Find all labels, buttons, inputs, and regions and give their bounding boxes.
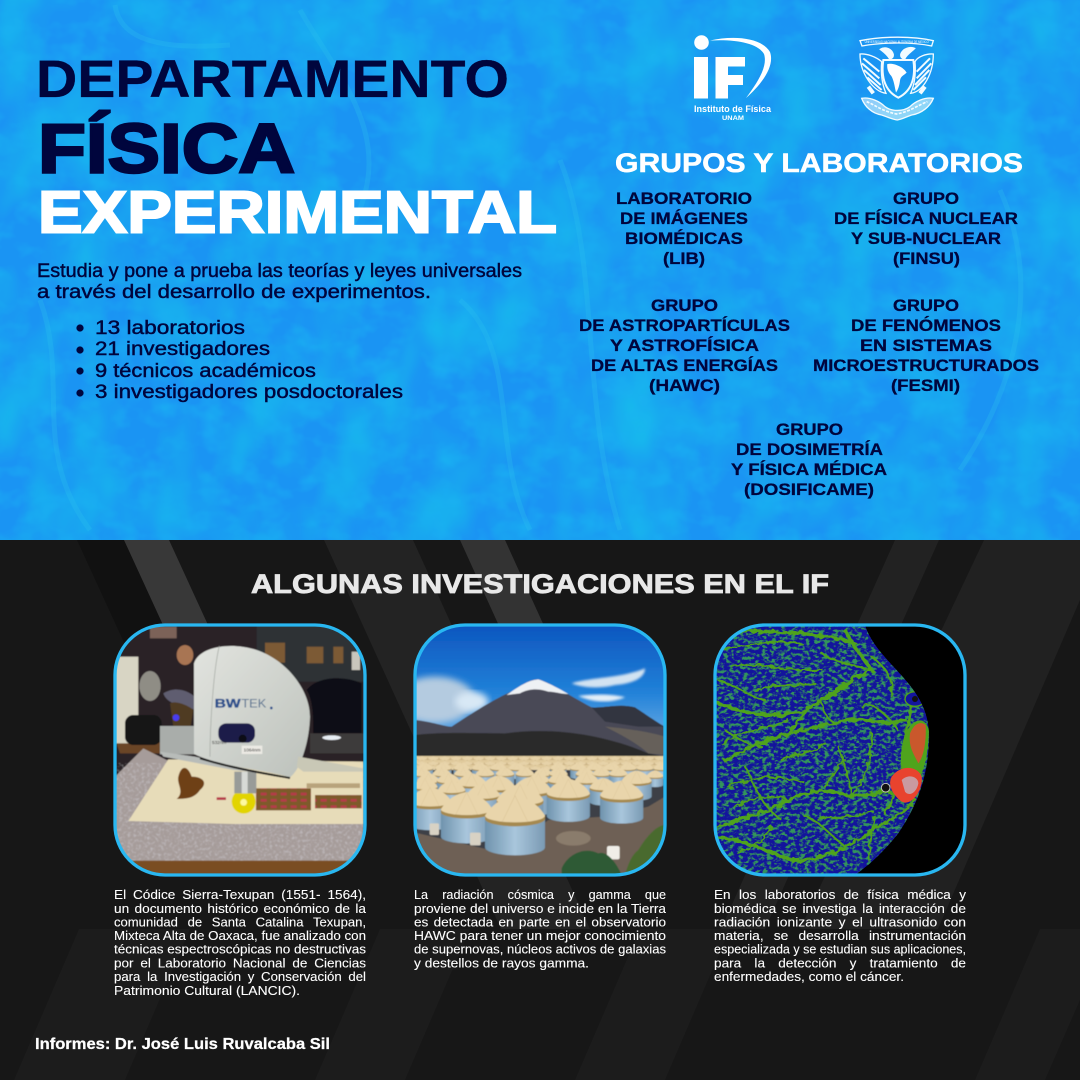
photo: spectrometer over codex: 1064nm: [244, 748, 261, 753]
group: Dosimetría y Física Médica: DE DOSIMETRÍA: [736, 440, 883, 459]
heading line: Física: FÍSICA: [38, 110, 295, 188]
list: department figures: 13 laboratorios: [95, 317, 245, 339]
icon: UNAM coat of arms: [860, 37, 933, 120]
group: Física Nuclear y Sub-Nuclear: Y SUB-NUCLEAR: [851, 229, 1001, 248]
text block: radiación cósmica: y destellos de rayos gamma.: [414, 956, 589, 970]
photo: HAWC observatory tanks and volcano: [395, 625, 670, 875]
text block: física médica y biomédica: En los laboratorios de física médica y: [714, 887, 967, 902]
text block: radiación cósmica: es detectada en parte en el observatorio: [414, 914, 666, 930]
panel: blue header background: [0, 0, 1080, 540]
group: Fenómenos en Sistemas Microestructurados: GRUPO: [893, 296, 959, 315]
text block: radiación cósmica: [414, 887, 667, 970]
heading: Algunas investigaciones en el IF: ALGUNAS INVESTIGACIONES EN EL IF: [251, 569, 829, 599]
photo: spectrometer over codex: 532nm: [212, 740, 226, 745]
text block: física médica y biomédica: especializada y se estudian sus aplicaciones,: [714, 942, 966, 956]
photo: spectrometer over codex: BW: [215, 696, 242, 710]
group: Física Nuclear y Sub-Nuclear: [834, 189, 1018, 268]
group: Laboratorio de Imágenes Biomédicas: LABORATORIO: [616, 189, 752, 208]
heading: Grupos y Laboratorios: GRUPOS Y LABORATORIOS: [615, 148, 1023, 178]
group: Astropartículas y Astrofísica: GRUPO: [651, 296, 718, 315]
group: Física Nuclear y Sub-Nuclear: DE FÍSICA NUCLEAR: [834, 209, 1018, 228]
text block: Códice Sierra-Texupan: El Códice Sierra-Texupan (1551- 1564),: [114, 887, 366, 902]
group: Dosimetría y Física Médica: (DOSIFICAME): [744, 480, 874, 499]
list: department figures: [77, 317, 403, 403]
footer: contact: Informes: Dr. José Luis Ruvalcaba Sil: [35, 1036, 330, 1053]
group: Laboratorio de Imágenes Biomédicas: BIOMÉDICAS: [625, 229, 743, 248]
group: Laboratorio de Imágenes Biomédicas: (LIB): [663, 249, 705, 268]
icon: Instituto de Física logo: Instituto de Física: [694, 104, 772, 114]
text block: Códice Sierra-Texupan: Mixteca Alta de Oaxaca, fue analizado con: [114, 928, 366, 943]
text block: Códice Sierra-Texupan: comunidad de Santa Catalina Texupan,: [114, 914, 366, 930]
group: Astropartículas y Astrofísica: DE ASTROPARTÍCULAS: [579, 316, 790, 335]
text block: física médica y biomédica: radiación ionizante y el ultrasonido con: [714, 914, 966, 930]
text block: Códice Sierra-Texupan: un documento histórico económico de la: [114, 901, 367, 916]
group: Laboratorio de Imágenes Biomédicas: [616, 189, 752, 268]
group: Dosimetría y Física Médica: Y FÍSICA MÉDICA: [731, 460, 887, 479]
panel: dark research section background: [0, 540, 1080, 1080]
photo: false-colour mammography: [715, 625, 965, 875]
group: Fenómenos en Sistemas Microestructurados: MICROESTRUCTURADOS: [813, 356, 1039, 375]
group: Laboratorio de Imágenes Biomédicas: DE IMÁGENES: [620, 209, 748, 228]
list: department figures: 9 técnicos académicos: [95, 360, 316, 382]
text block: Códice Sierra-Texupan: por el Laboratorio Nacional de Ciencias: [114, 956, 367, 970]
text block: department description: Estudia y pone a prueba las teorías y leyes universales: [37, 260, 522, 282]
list: department figures: 3 investigadores posdoctorales: [95, 381, 403, 403]
group: Fenómenos en Sistemas Microestructurados: EN SISTEMAS: [860, 336, 992, 355]
group: Astropartículas y Astrofísica: (HAWC): [649, 376, 720, 395]
heading line: Experimental: EXPERIMENTAL: [38, 180, 557, 246]
text block: física médica y biomédica: materia, se desarrolla instrumentación: [714, 928, 966, 943]
group: Física Nuclear y Sub-Nuclear: GRUPO: [893, 189, 959, 208]
icon: Instituto de Física logo: UNAM: [722, 115, 744, 122]
group: Astropartículas y Astrofísica: DE ALTAS ENERGÍAS: [591, 356, 778, 375]
title: Departamento Física Experimental: [36, 50, 557, 246]
icon: Instituto de Física logo: [694, 35, 772, 122]
text block: física médica y biomédica: para la detección y tratamiento de: [714, 956, 966, 970]
group: Astropartículas y Astrofísica: Y ASTROFÍSICA: [610, 336, 759, 355]
icon: UNAM coat of arms: UNIVERSIDAD NACIONAL AUTONOMA DE MEXICO: [865, 40, 929, 44]
text block: Códice Sierra-Texupan: para la Investigación y Conservación del: [114, 969, 366, 984]
text block: radiación cósmica: HAWC para tener un mejor conocimiento: [414, 928, 666, 943]
photo: spectrometer over codex: [115, 625, 365, 875]
text block: radiación cósmica: proviene del universo e incide en la Tierra: [414, 901, 667, 916]
group: Dosimetría y Física Médica: GRUPO: [776, 420, 843, 439]
list: department figures: 21 investigadores: [95, 338, 270, 360]
text block: department description: a través del desarrollo de experimentos.: [37, 281, 431, 303]
text block: department description: [37, 260, 522, 303]
text block: Códice Sierra-Texupan: [114, 887, 367, 998]
text block: física médica y biomédica: [714, 887, 967, 984]
text block: física médica y biomédica: enfermedades, como el cáncer.: [714, 969, 904, 984]
heading line: Departamento: DEPARTAMENTO: [36, 50, 509, 109]
text block: radiación cósmica: La radiación cósmica y gamma que: [414, 887, 666, 902]
group: Astropartículas y Astrofísica: [579, 296, 790, 395]
photo: spectrometer over codex: TEK: [241, 696, 266, 710]
text block: radiación cósmica: de supernovas, núcleos activos de galaxias: [414, 942, 667, 956]
group: Fenómenos en Sistemas Microestructurados: [813, 296, 1039, 395]
text block: Códice Sierra-Texupan: técnicas espectroscópicas no destructivas: [114, 942, 367, 956]
group: Fenómenos en Sistemas Microestructurados: DE FENÓMENOS: [851, 316, 1001, 335]
text block: Códice Sierra-Texupan: Patrimonio Cultural (LANCIC).: [114, 983, 300, 998]
text block: física médica y biomédica: biomédica se investiga la interacción de: [714, 901, 966, 916]
group: Fenómenos en Sistemas Microestructurados: (FESMI): [891, 376, 960, 395]
group: Dosimetría y Física Médica: [731, 420, 887, 499]
group: Física Nuclear y Sub-Nuclear: (FINSU): [893, 249, 960, 268]
